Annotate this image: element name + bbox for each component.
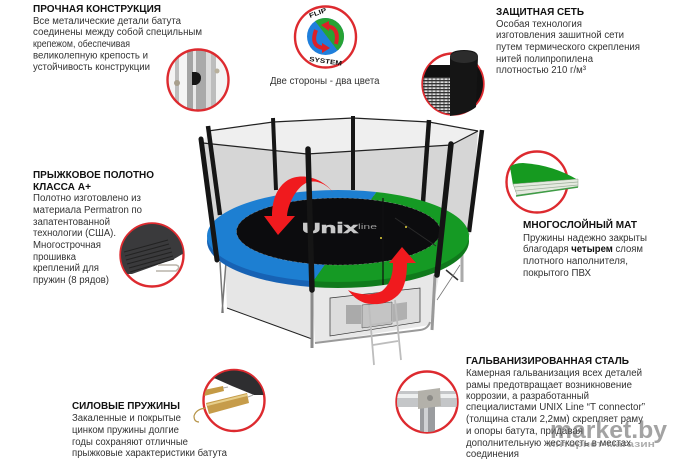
trampoline illustration (201, 116, 482, 365)
panel: flip system (270, 6, 380, 87)
text block: multilayer mat: Пружины надежно закрыты (523, 233, 647, 244)
icon: mat layers circle (506, 152, 578, 212)
text block: galvanized steel: (толщина стали 2,2мм) скрепляет раму (466, 414, 643, 425)
icon: flip system badge (295, 6, 356, 68)
heading: jumping surface: ПРЫЖКОВОЕ ПОЛОТНО (33, 170, 154, 181)
jumping surface (236, 198, 440, 265)
heading: sturdy construction: ПРОЧНАЯ КОНСТРУКЦИЯ (33, 4, 161, 15)
arrow: bottom rotation (348, 247, 416, 304)
text block: galvanized steel: специалистами UNIX Line “T connector” (466, 402, 645, 413)
text block: jumping surface: Полотно изготовлено из (33, 193, 141, 204)
text block: jumping surface (33, 193, 142, 286)
panel: multilayer mat (506, 152, 647, 279)
text block: power springs (72, 413, 227, 459)
text block: galvanized steel: коррозии, а разработанный (466, 390, 589, 402)
arrow: top rotation (264, 176, 333, 235)
panel: galvanized steel (395, 356, 645, 460)
text block: sturdy construction: соединены между собой специльным (33, 26, 202, 38)
icon: flip system badge: SYSTEM (309, 56, 342, 68)
logo: line (358, 224, 377, 231)
text block: jumping surface: материала Permatron по (33, 205, 142, 216)
text block: jumping surface: пружин (8 рядов) (33, 275, 109, 286)
panel: power springs (72, 368, 264, 459)
text block: multilayer mat (523, 233, 647, 279)
text block: galvanized steel: соединения (466, 449, 519, 460)
text block: galvanized steel: и опоры батута, придавая (466, 425, 583, 437)
text block: safety net (496, 18, 640, 76)
icon: T connector circle (395, 372, 459, 434)
text block: safety net: нитей полипропилена (496, 54, 593, 65)
text block: power springs: годы сохраняют отличные (72, 437, 188, 448)
panel: sturdy construction (33, 4, 231, 112)
logo (302, 220, 377, 237)
text block: sturdy construction: Все металические детали батута (33, 15, 181, 27)
skirt and frame (220, 250, 462, 348)
text block: jumping surface: креплений для (33, 263, 99, 274)
text block: sturdy construction (33, 15, 202, 73)
text block: power springs: цинком пружины долгие (72, 425, 179, 436)
text block: multilayer mat: покрытого ПВХ (523, 268, 591, 279)
text block: galvanized steel (466, 368, 645, 460)
text block: multilayer mat: благодаря четырем слоям (523, 243, 643, 255)
text block: jumping surface: запатентованной (33, 217, 110, 228)
text block: jumping surface: технологии (США). (33, 228, 116, 239)
icon: spring circle (194, 368, 264, 431)
ladder (369, 300, 401, 365)
text block: galvanized steel: рамы предотвращает возникновение (466, 380, 632, 391)
text block: safety net: плотностью 210 г/м³ (496, 65, 587, 76)
back poles (208, 116, 482, 232)
panel: jumping surface (33, 170, 186, 286)
text block: sturdy construction: великолепную крепость и (33, 50, 148, 62)
heading: safety net: ЗАЩИТНАЯ СЕТЬ (496, 7, 584, 18)
text block: jumping surface: Многострочная (33, 240, 101, 251)
icon: frame joint circle (165, 48, 231, 112)
text block: safety net: изготовления зашитной сети (496, 30, 624, 41)
trampoline pad (207, 190, 469, 288)
safety net enclosure (203, 118, 478, 262)
caption: flip system: Две стороны - два цвета (270, 76, 380, 87)
text block: jumping surface: прошивка (33, 252, 76, 263)
heading: jumping surface (33, 170, 154, 193)
heading: galvanized steel: ГАЛЬВАНИЗИРОВАННАЯ СТАЛЬ (466, 356, 629, 367)
mat straps and dots (380, 198, 436, 285)
icon: net detail circle (420, 50, 490, 117)
logo: Unix (302, 220, 359, 237)
heading: multilayer mat: МНОГОСЛОЙНЫЙ МАТ (523, 218, 637, 231)
icon: flip system badge: FLIP (308, 7, 328, 20)
heading: jumping surface: КЛАССА А+ (33, 182, 91, 193)
text block: sturdy construction: крепежом, обеспечивая (33, 38, 130, 50)
panel: safety net (420, 7, 640, 117)
heading: power springs: СИЛОВЫЕ ПРУЖИНЫ (72, 401, 180, 412)
front poles (201, 139, 451, 290)
icon: jumping mat circle (118, 222, 186, 286)
text block: galvanized steel: дополнительную жесткость в местах (466, 438, 631, 449)
watermark: market.by (550, 417, 668, 444)
text block: power springs: Закаленные и покрытые (72, 413, 181, 424)
watermark: интернет-магазин (548, 439, 655, 449)
text block: galvanized steel: Камерная гальванизация всех деталей (466, 368, 642, 379)
text block: sturdy construction: устойчивость конструкции (33, 62, 150, 73)
text block: safety net: путем термического скрепления (496, 42, 640, 53)
text block: safety net: Особая технология (496, 18, 582, 30)
text block: multilayer mat: плотного наполнителя, (523, 256, 628, 267)
text block: power springs: прыжковые характеристики батута (72, 447, 227, 459)
